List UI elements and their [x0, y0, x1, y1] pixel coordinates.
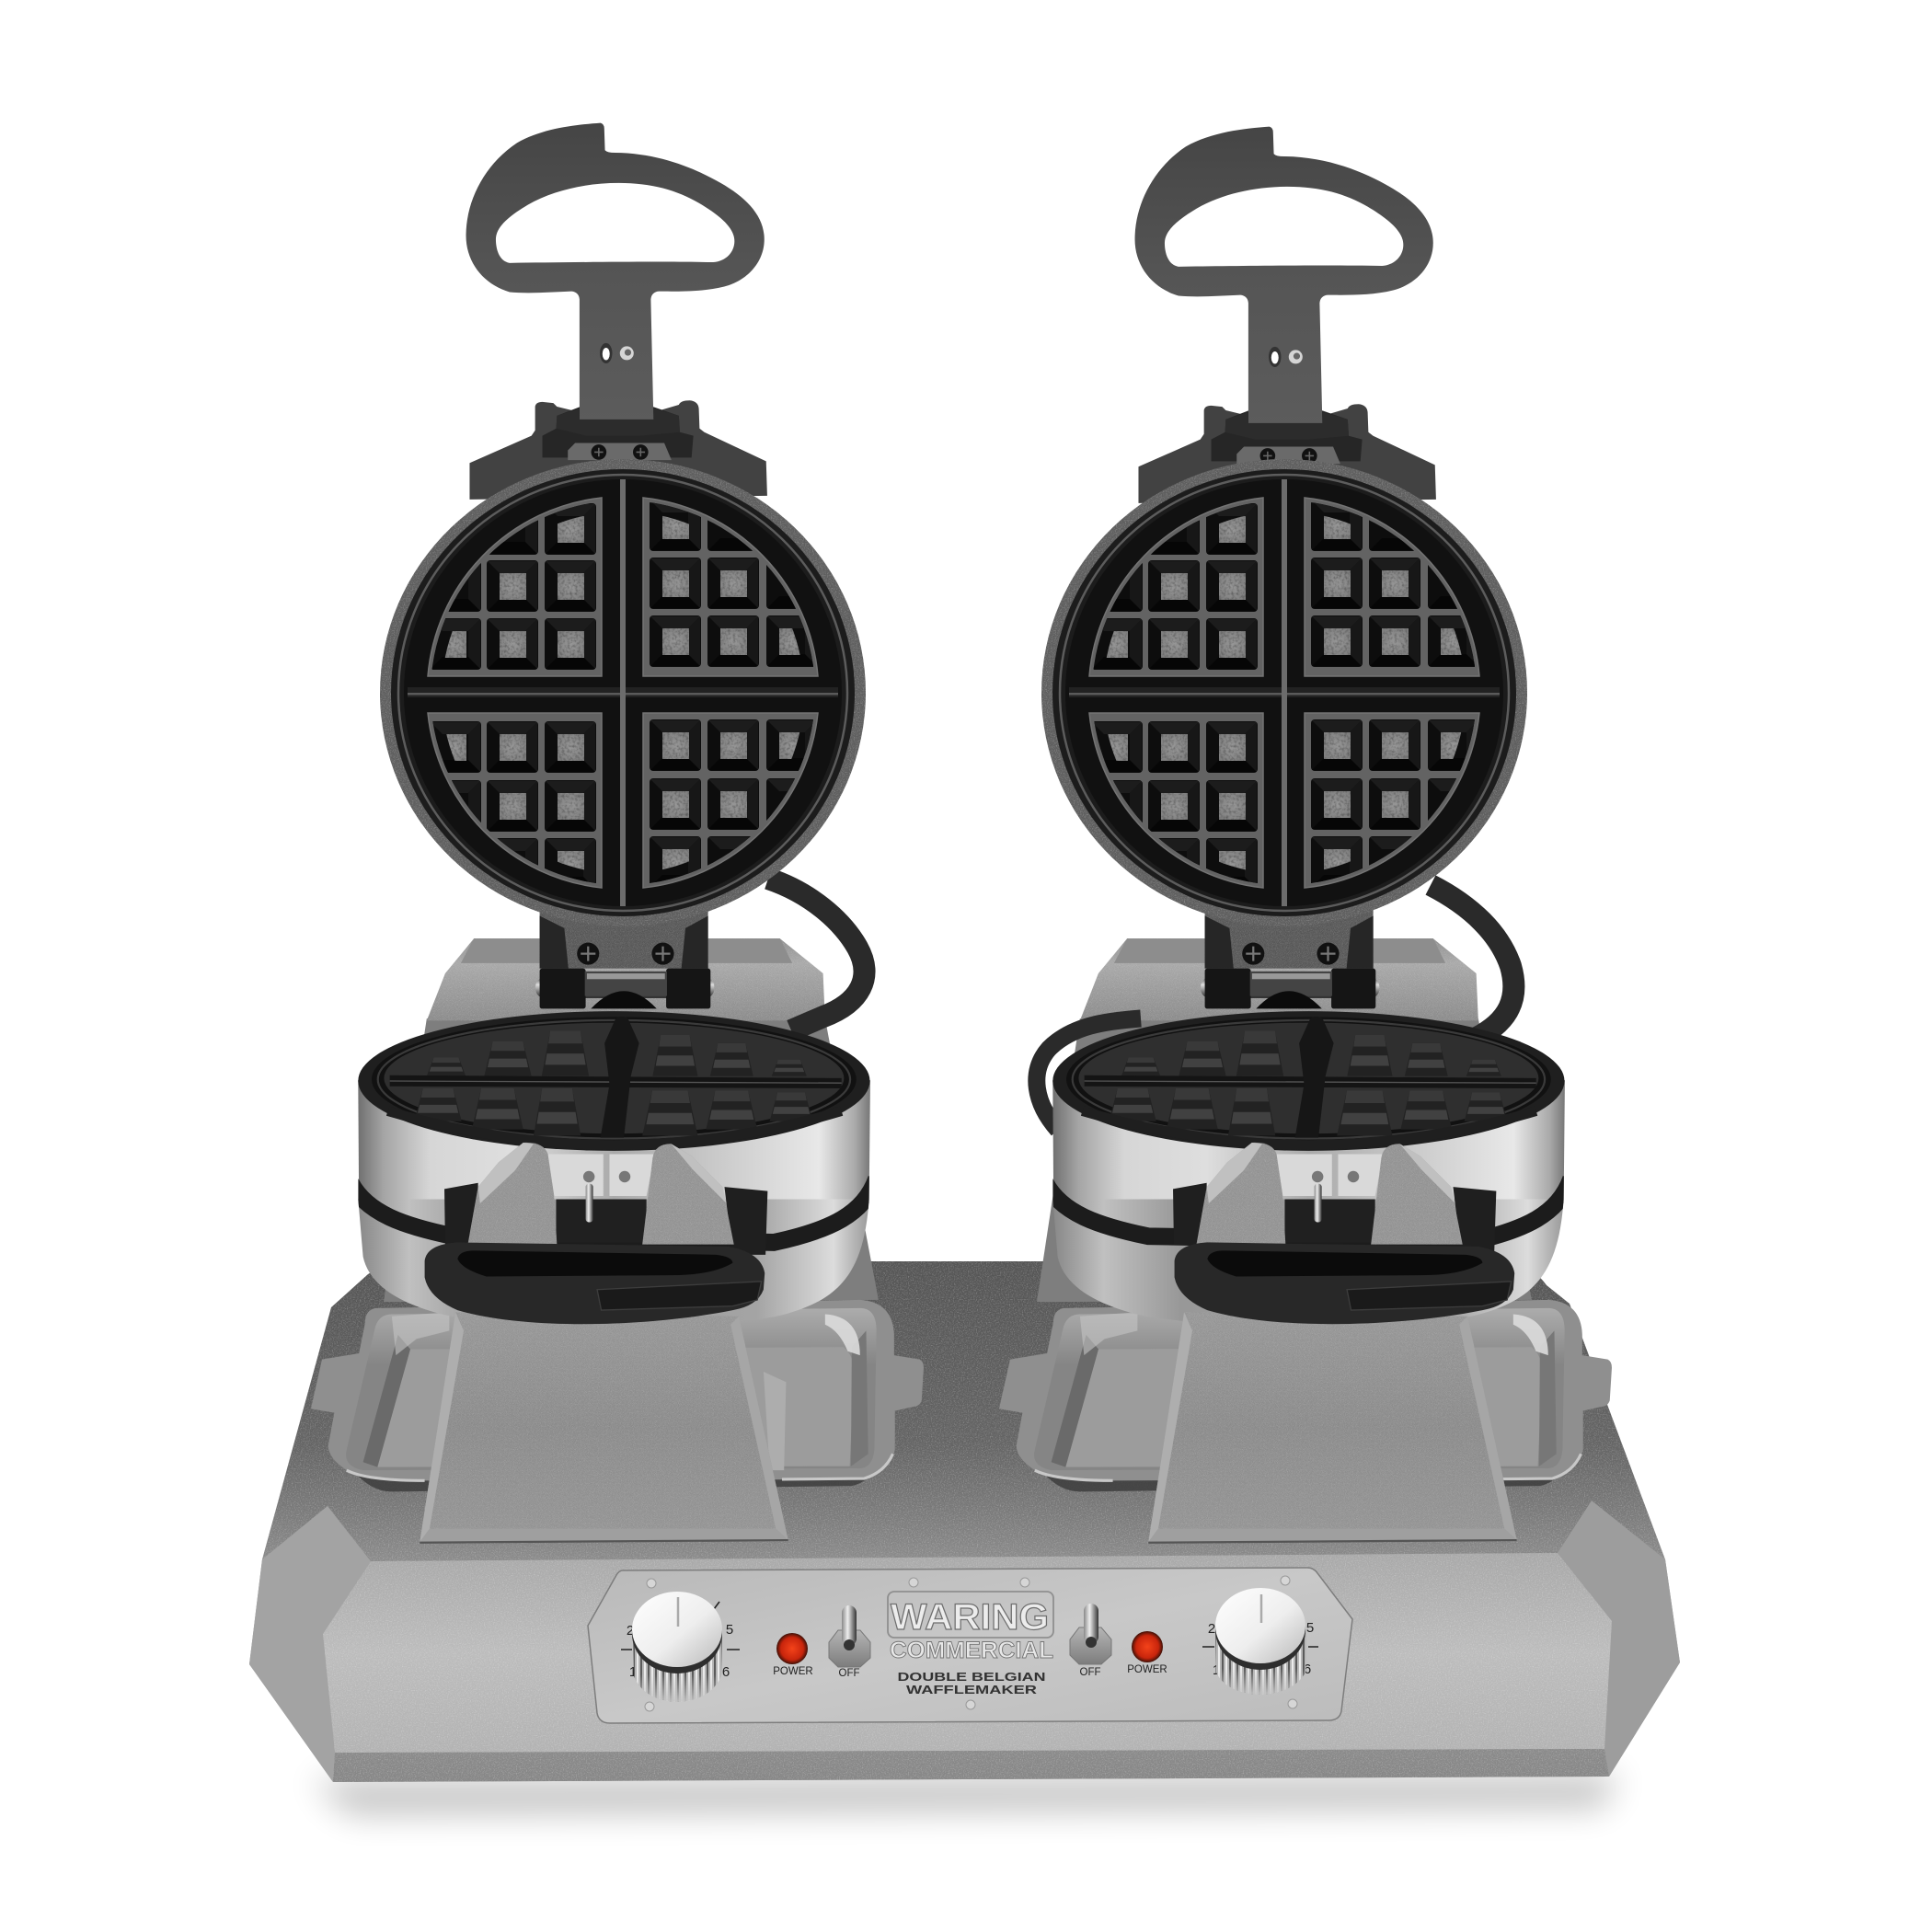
- left base facet: [249, 1506, 371, 1782]
- right toggle switch: [1070, 1604, 1111, 1664]
- rotating grip: left: [425, 1242, 765, 1324]
- left power label: POWER: [773, 1666, 813, 1677]
- power cord: right upper: [1431, 885, 1513, 1038]
- base front face: [323, 1553, 1612, 1753]
- product name line 1: DOUBLE BELGIAN: [898, 1670, 1045, 1684]
- drip tray: left: [311, 1300, 924, 1491]
- right temperature knob: [1215, 1588, 1306, 1695]
- control panel: [588, 1568, 1352, 1723]
- lower waffle body: left: [351, 1011, 877, 1327]
- right dial scale: 6: [1304, 1662, 1311, 1677]
- rear pedestal: left: [384, 938, 879, 1302]
- brand logo frame: [888, 1592, 1053, 1638]
- lid handle: right: [1135, 127, 1436, 503]
- brushed steel plate: [588, 1568, 1352, 1723]
- base: [249, 1261, 1680, 1782]
- right base facet: [1558, 1501, 1680, 1777]
- rear pedestal: right: [1037, 938, 1532, 1302]
- waffle plate: left lid: [380, 459, 866, 926]
- right power label: POWER: [1127, 1664, 1167, 1675]
- stand: left: [420, 1143, 788, 1543]
- product illustration: double belgian wafflemaker: [249, 123, 1680, 1831]
- hinge: left: [535, 908, 714, 1008]
- left power indicator: [776, 1633, 808, 1664]
- rivets: [645, 1576, 1297, 1711]
- left dial scale: 2: [627, 1623, 634, 1639]
- right dial scale: 2: [1208, 1621, 1215, 1637]
- floor shadow: [313, 1776, 1619, 1814]
- lid handle: left: [466, 123, 767, 500]
- rotating grip: right: [1175, 1242, 1514, 1324]
- lower waffle body: right: [1045, 1011, 1571, 1327]
- left off label: OFF: [839, 1668, 859, 1679]
- hinge: right: [1201, 908, 1379, 1008]
- base top surface: [249, 1261, 1680, 1782]
- stand: right: [1148, 1143, 1517, 1543]
- brand: waring: WARING: [891, 1597, 1049, 1638]
- right dial scale: 1: [1213, 1662, 1220, 1678]
- right dial scale: [1202, 1620, 1318, 1678]
- base front lower strip: [333, 1749, 1609, 1782]
- brand: commercial: COMMERCIAL: [890, 1638, 1053, 1663]
- product name line 2: WAFFLEMAKER: [906, 1683, 1038, 1696]
- right power indicator: [1132, 1631, 1163, 1662]
- right off label: OFF: [1080, 1667, 1100, 1678]
- right dial scale: 5: [1306, 1620, 1314, 1636]
- left dial scale: 6: [722, 1664, 730, 1680]
- waffle plate: right lid: [1041, 459, 1527, 926]
- power cord: left: [768, 879, 865, 1030]
- power cord: right lower: [1037, 1018, 1141, 1130]
- left dial scale: [621, 1602, 740, 1680]
- left toggle switch: [829, 1605, 870, 1667]
- left dial scale: 5: [726, 1622, 733, 1638]
- left dial scale: 1: [629, 1664, 637, 1680]
- left temperature knob: [632, 1592, 722, 1702]
- drip tray: right: [999, 1300, 1612, 1491]
